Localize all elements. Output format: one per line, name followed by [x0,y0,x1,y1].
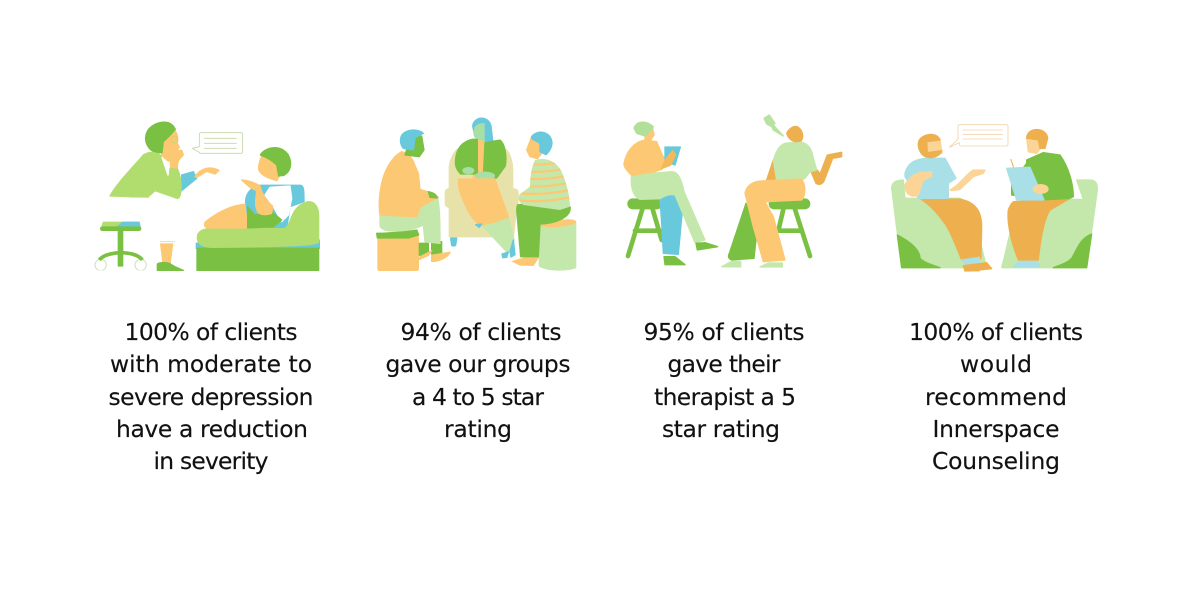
text block: group rating statistic [386,318,570,443]
text block: recommendation statistic: 100% of clients [909,318,1083,346]
text block: depression statistic: have a reduction [116,415,308,443]
text block: therapist rating statistic [644,318,804,443]
text block: recommendation statistic: Counseling [932,447,1060,475]
text block: therapist rating statistic: 95% of clients [644,318,804,346]
speech bubble [949,125,1008,147]
text block: therapist rating statistic: gave their [668,350,781,378]
illustration: therapist with clipboard and client in armchairs [892,125,1097,271]
text block: therapist rating statistic: therapist a 5 [654,383,796,411]
man talking [722,126,842,267]
text block: recommendation statistic: Innerspace [932,415,1060,443]
boy figure [204,148,292,228]
text block: depression statistic: in severity [154,447,269,475]
illustration: therapist and boy on couch [93,122,319,272]
text block: group rating statistic: a 4 to 5 star [412,383,544,411]
speech wedge [764,115,783,136]
text block: group rating statistic: gave our groups [386,350,570,378]
man with clipboard [1007,130,1073,267]
text block: group rating statistic: rating [444,415,512,443]
bearded man [905,134,992,271]
text block: group rating statistic: 94% of clients [400,318,562,346]
text block: depression statistic: severe depression [108,383,314,411]
illustration: two people on stools [624,115,842,267]
right armchair [1002,180,1097,268]
stool [93,222,148,272]
text block: depression statistic: with moderate to [110,350,312,378]
couch [196,185,319,270]
left man on cube [377,130,450,270]
woman with tablet [624,122,718,265]
illustration: group therapy session [377,118,576,270]
text block: recommendation statistic: recommend [925,383,1067,411]
text block: depression statistic [108,318,314,475]
speech bubble [192,133,243,153]
text block: depression statistic: 100% of clients [124,318,298,346]
left stool [628,199,662,256]
armchair [445,146,518,246]
therapist figure [110,122,219,270]
left armchair [892,180,987,268]
text block: recommendation statistic: would [960,350,1032,378]
right stool [769,199,810,256]
right man on round stool [513,132,576,270]
text block: recommendation statistic [909,318,1083,475]
woman in chair [455,118,515,258]
text block: therapist rating statistic: star rating [662,415,780,443]
